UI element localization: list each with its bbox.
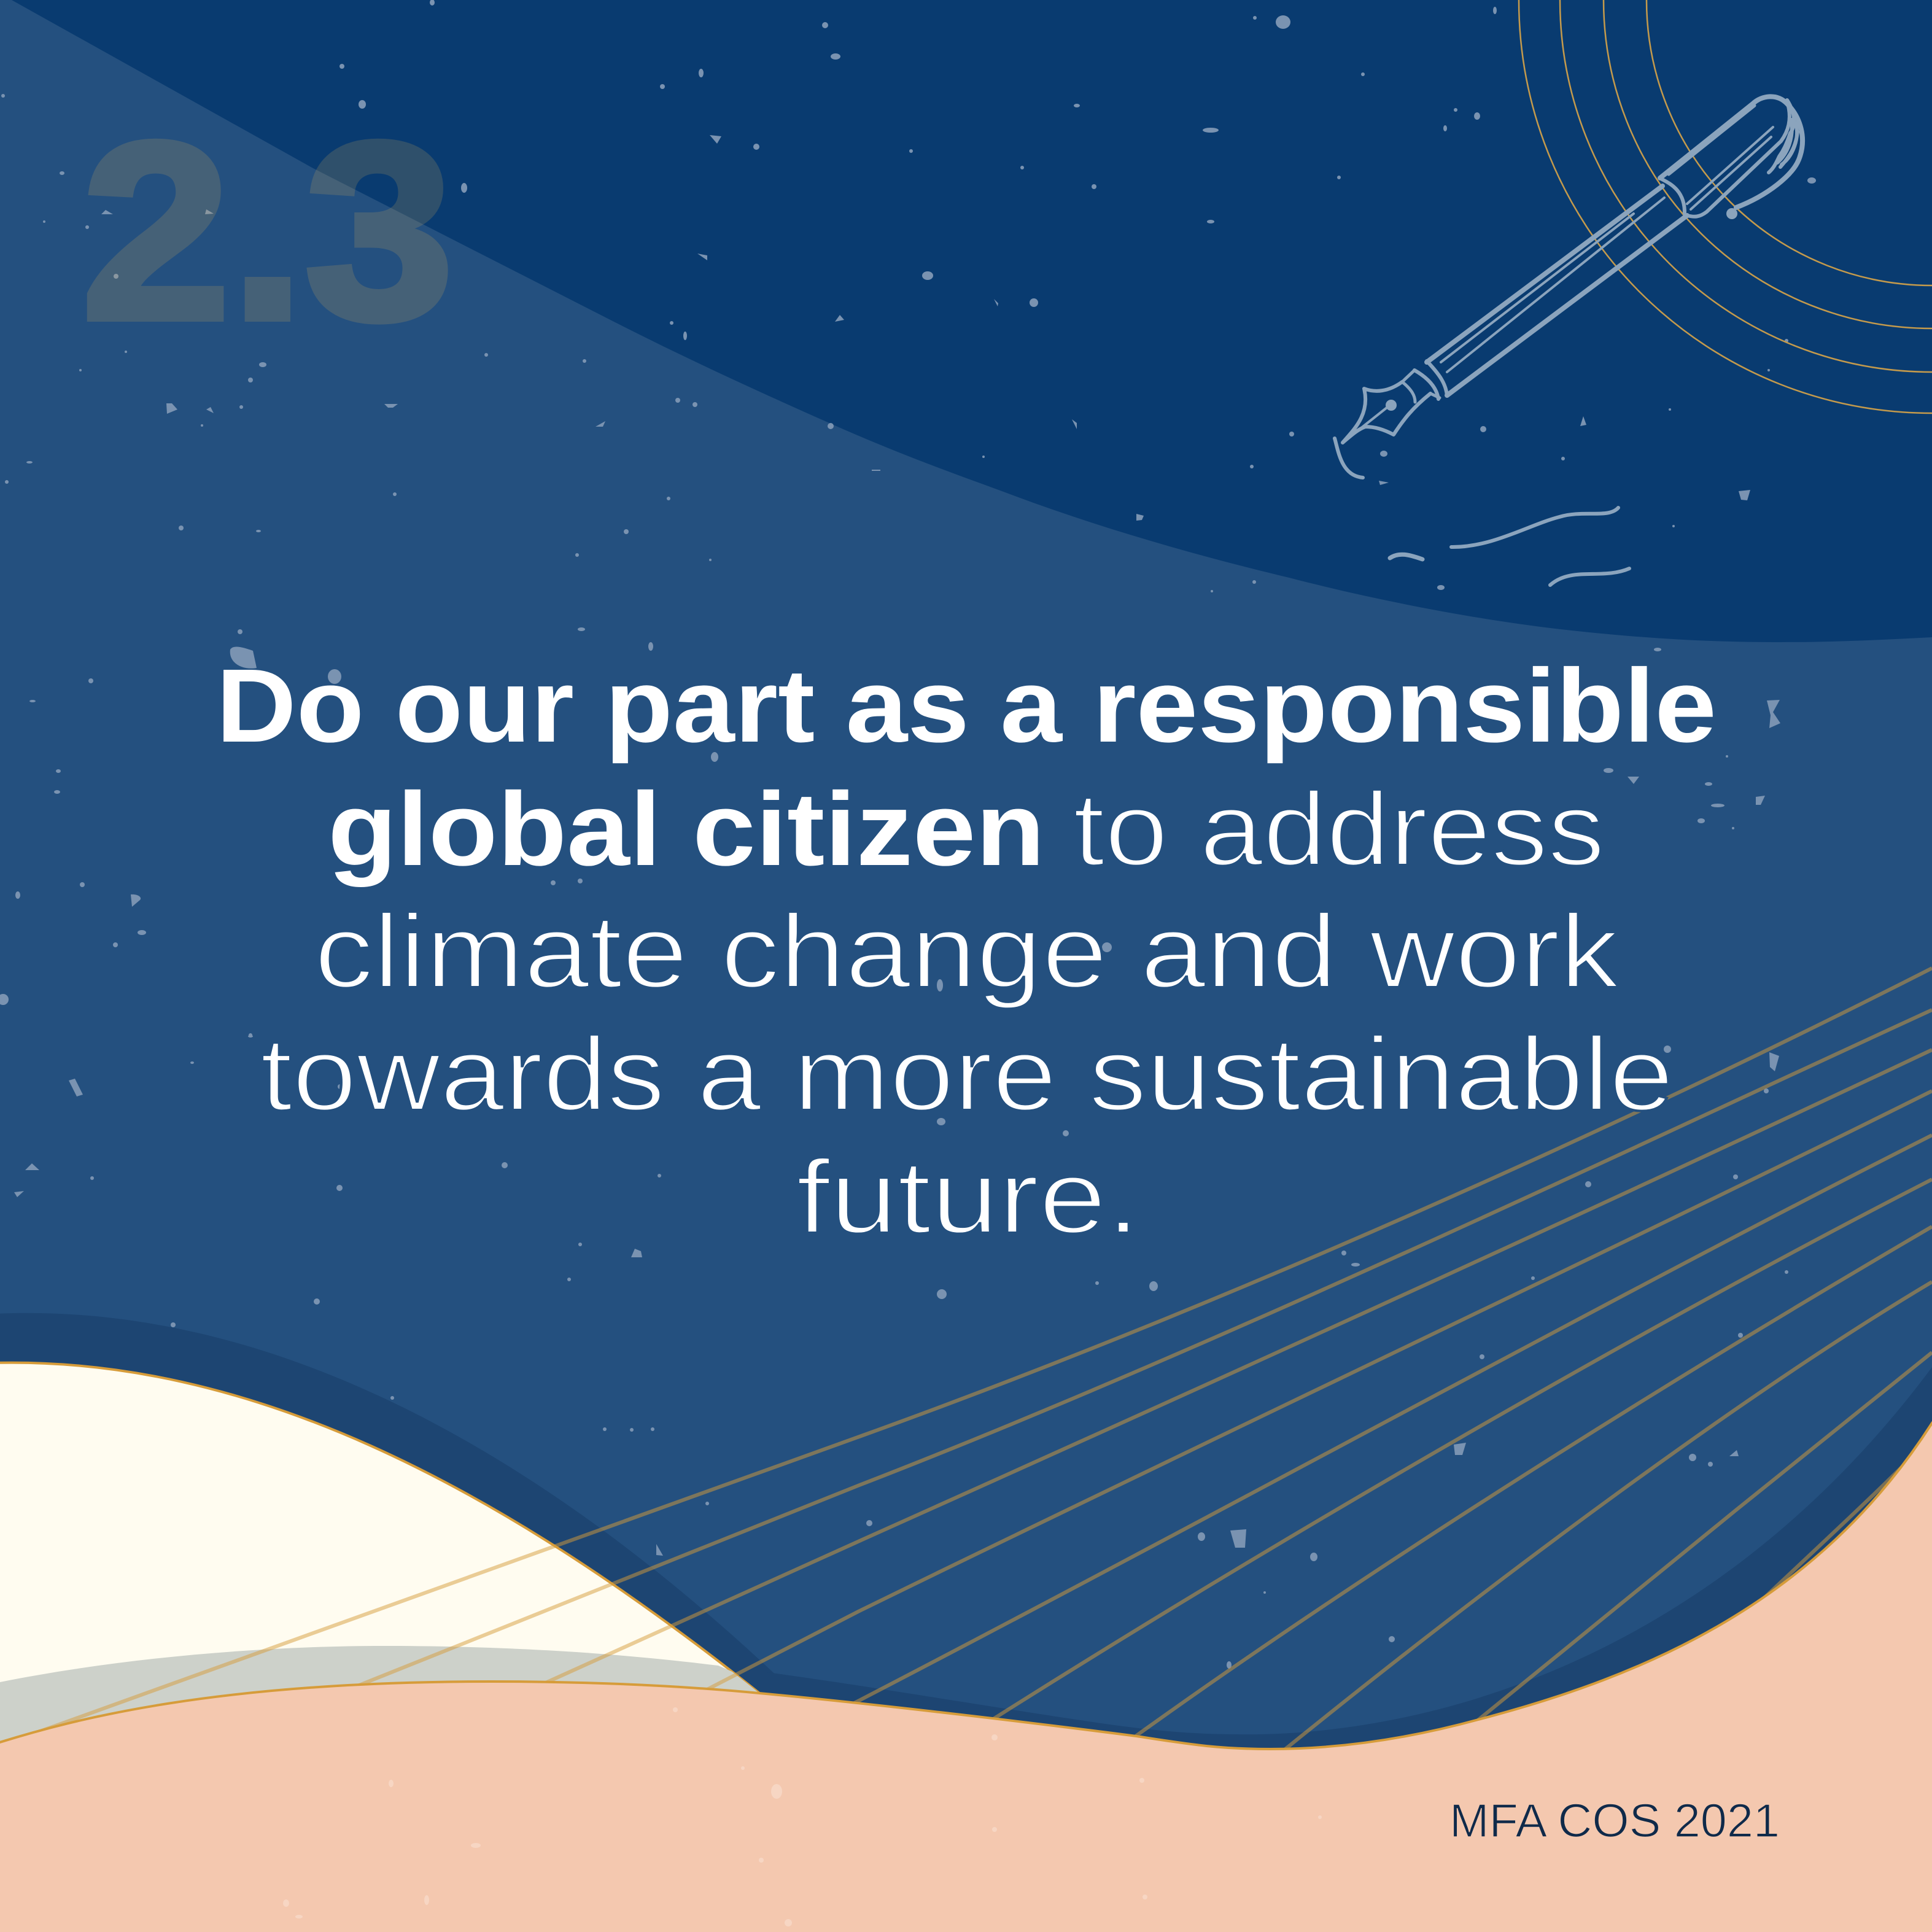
gold concentric arcs (1519, 0, 1932, 413)
main statement text (216, 648, 1717, 1255)
peach speckles (283, 1707, 1322, 1926)
line 2 bold: global citizen (328, 771, 1045, 888)
title number: 2.3: 2.3 (82, 90, 454, 371)
line 1: Do our part as a responsible (216, 648, 1717, 764)
icon: fountain pen (1335, 96, 1802, 585)
pen cap (1660, 96, 1802, 208)
peach foreground wave (0, 1412, 1932, 1932)
pen collar (1414, 361, 1447, 399)
line 3: climate change and work (314, 893, 1620, 1010)
cream hill (0, 1363, 759, 1780)
grey shadow on cream hill (0, 1646, 758, 1741)
pen nib (1343, 382, 1430, 443)
line 2 regular: to address (1073, 771, 1605, 888)
pen barrel (1427, 186, 1687, 395)
ink squiggles (1335, 438, 1363, 478)
footer credit: MFA COS 2021 (1449, 1794, 1780, 1847)
line 5: future. (796, 1139, 1140, 1255)
wave shadow: dark blue band (0, 1313, 1932, 1811)
line 4: towards a more sustainable (260, 1016, 1674, 1133)
gold string lines (37, 968, 1932, 1756)
